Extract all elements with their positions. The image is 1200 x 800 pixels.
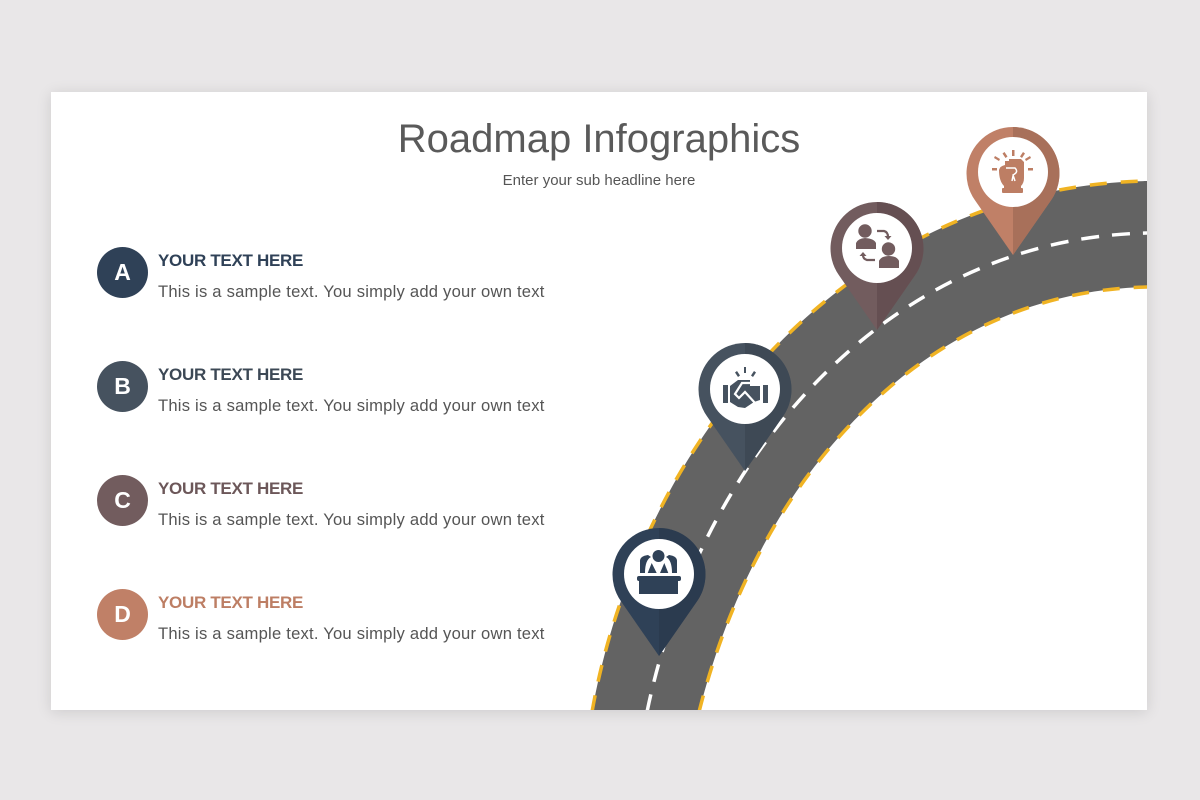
item C: This is a sample text. You simply add your own text	[158, 510, 545, 529]
item C: C	[114, 487, 131, 513]
item C	[97, 475, 545, 529]
item B: YOUR TEXT HERE	[158, 365, 303, 384]
icon: podium	[637, 550, 681, 594]
item D	[97, 589, 545, 643]
road	[592, 181, 1149, 712]
item A	[97, 247, 545, 301]
item A: YOUR TEXT HERE	[158, 251, 303, 270]
sub headline: Enter your sub headline here	[503, 172, 695, 189]
item C: YOUR TEXT HERE	[158, 479, 303, 498]
icon: raised fist	[992, 150, 1033, 193]
item D: D	[114, 601, 131, 627]
title: Roadmap Infographics	[398, 117, 800, 161]
item D: YOUR TEXT HERE	[158, 593, 303, 612]
item B: B	[114, 373, 131, 399]
pin 2: handshake	[698, 343, 792, 471]
pin 1: speaker podium	[612, 528, 706, 656]
item D: This is a sample text. You simply add your own text	[158, 624, 545, 643]
item A: A	[114, 259, 131, 285]
item B: This is a sample text. You simply add your own text	[158, 396, 545, 415]
icon: two people with arrows	[856, 224, 899, 268]
roadmap graphic	[590, 127, 1147, 710]
slide card	[51, 92, 1147, 710]
pin 4: fist	[967, 127, 1060, 255]
icon: handshake	[723, 367, 768, 408]
item B	[97, 361, 545, 415]
pin 3: people exchange	[830, 202, 924, 330]
item A: This is a sample text. You simply add your own text	[158, 282, 545, 301]
